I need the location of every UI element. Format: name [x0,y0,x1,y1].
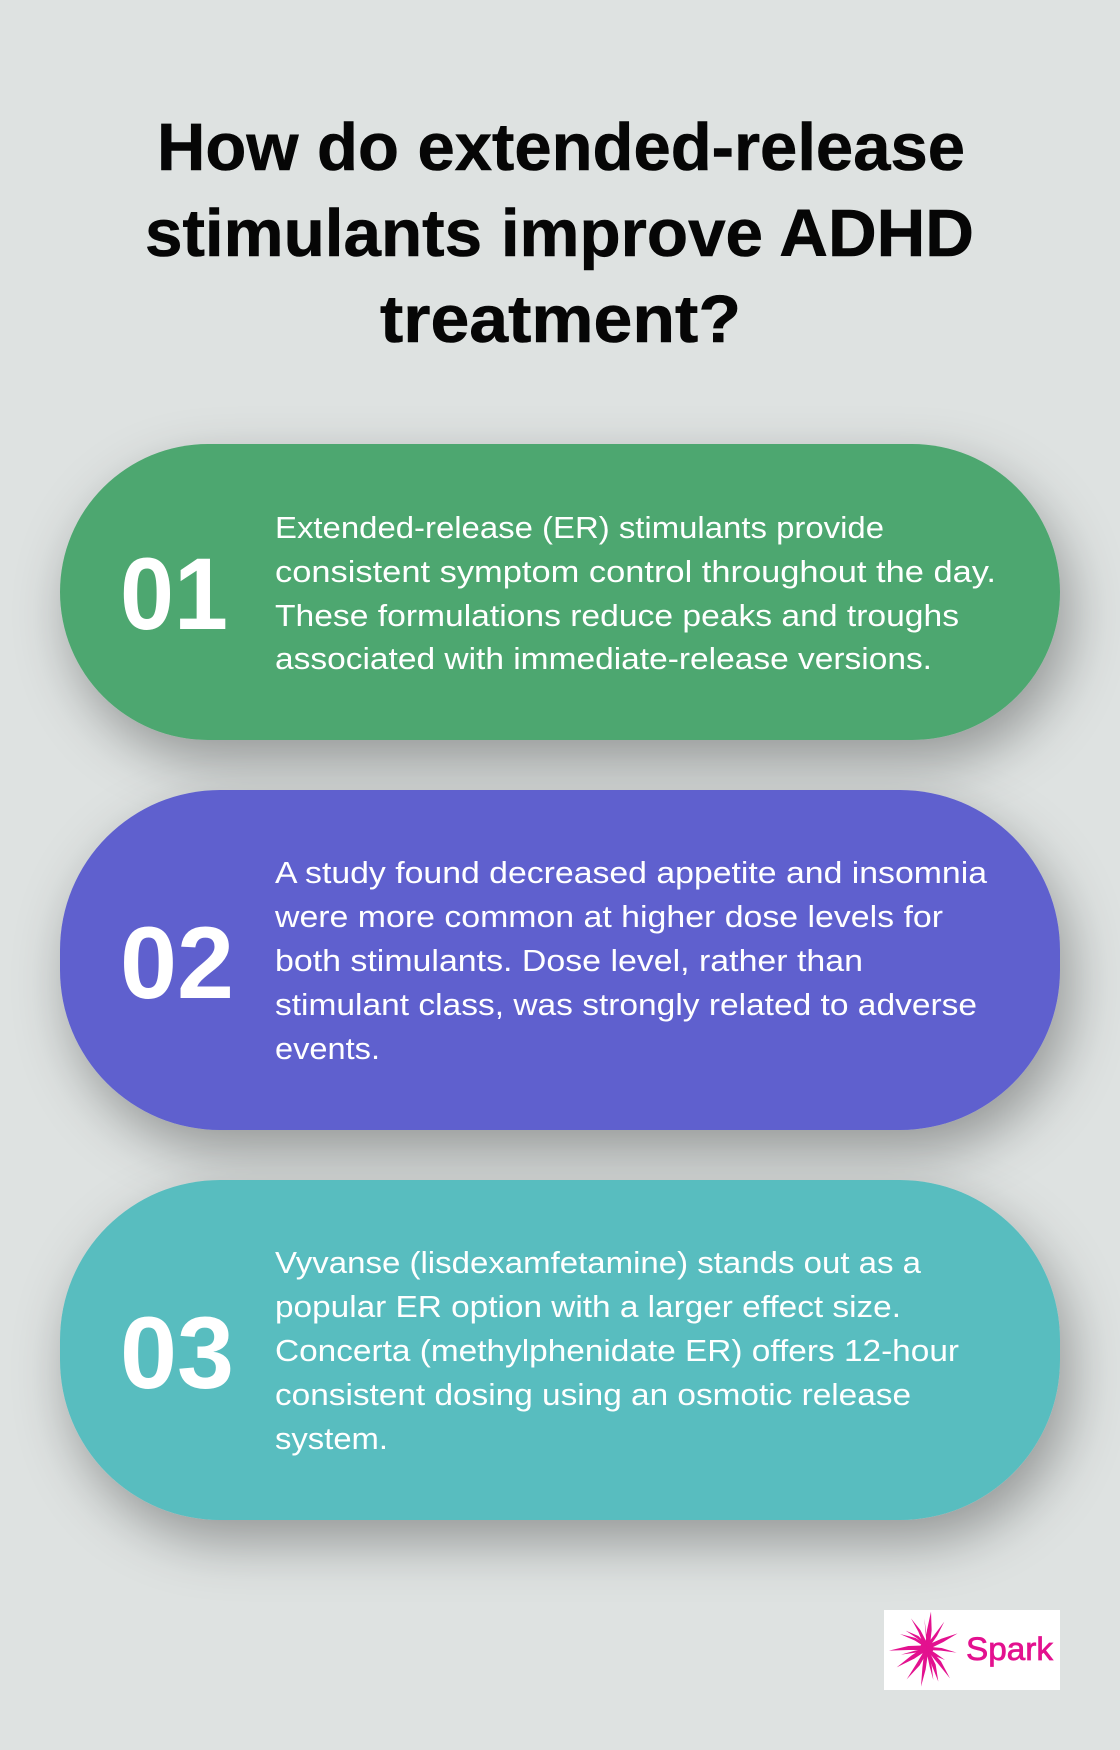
text block: step 01: associated with immediate-release versions. [275,641,932,676]
panel background: teal pill [60,1180,1060,1520]
text block: step 02: both stimulants. Dose level, rather than [275,943,863,978]
text block: step 03: Concerta (methylphenidate ER) offers 12-hour [275,1333,959,1368]
logo: Spark [884,1610,1060,1690]
number 01: 01 [120,537,228,651]
panel background: green pill [60,444,1060,740]
text block: step 03: system. [275,1421,388,1456]
text block: step 02 [274,855,988,1066]
panel background: purple pill [60,790,1060,1130]
panel: step 01 [60,444,1060,740]
panel: step 03 [60,1180,1060,1520]
text block: step 03: Vyvanse (lisdexamfetamine) stands out as a [275,1245,922,1280]
text block: step 02: stimulant class, was strongly related to adverse [275,987,977,1022]
text block: step 03: consistent dosing using an osmotic release [275,1377,911,1412]
text block: step 01: Extended-release (ER) stimulants provide [275,510,884,545]
logo wordmark: Spark [966,1631,1054,1667]
text block: step 01: These formulations reduce peaks and troughs [275,598,959,633]
text block: step 01 [275,510,996,676]
panel: step 02 [60,790,1060,1130]
number 03: 03 [120,1296,234,1410]
text block: step 02: were more common at higher dose levels for [274,899,943,934]
title [145,110,974,357]
text block: step 02: A study found decreased appetite and insomnia [275,855,988,890]
text block: step 01: consistent symptom control throughout the day. [275,554,996,589]
title: treatment? [380,282,741,357]
icon: Spark starburst [889,1612,958,1687]
title: stimulants improve ADHD [145,196,974,271]
text block: step 03 [275,1245,959,1456]
text block: step 02: events. [275,1031,380,1066]
text block: step 03: popular ER option with a larger effect size. [275,1289,901,1324]
title: How do extended-release [157,110,965,185]
number 02: 02 [120,906,234,1020]
